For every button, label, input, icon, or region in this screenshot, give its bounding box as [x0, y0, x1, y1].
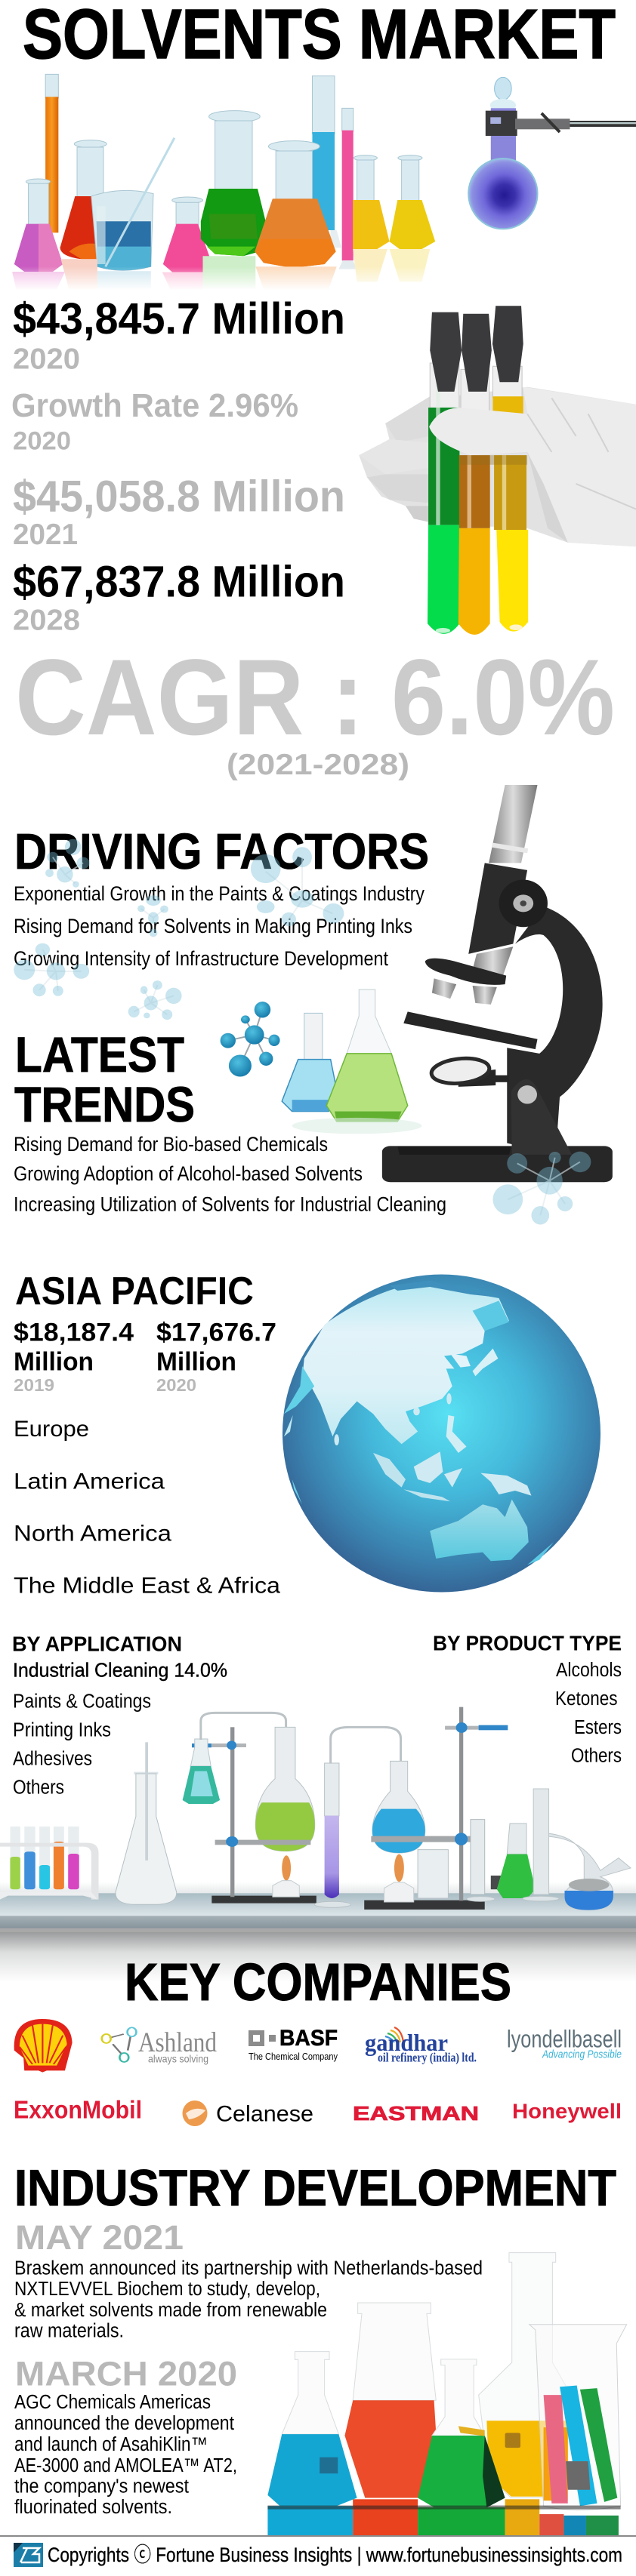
unit 2019: Million [14, 1348, 94, 1377]
logo: Honeywell: Honeywell [512, 2100, 622, 2123]
flask cyan [267, 2352, 357, 2506]
logo: ExxonMobil: ExxonMobil [14, 2096, 142, 2124]
purple test tube [314, 1763, 351, 1907]
region: Europe: Europe [14, 1417, 89, 1442]
growth year: 2020 [13, 427, 71, 456]
flask: green [201, 111, 267, 256]
region: Latin America: Latin America [14, 1470, 165, 1494]
trend 1: Rising Demand for Bio-based Chemicals [14, 1133, 328, 1156]
application: printing inks: Printing Inks [13, 1720, 111, 1741]
molecule top-centre [251, 847, 344, 926]
region: Middle East: The Middle East & Africa [14, 1574, 280, 1599]
flask: magenta [14, 179, 63, 272]
test tube yellow [492, 366, 528, 632]
round flask blue [372, 1761, 425, 1853]
conical flask clear [116, 1742, 177, 1904]
illustration: microscope with flasks [221, 785, 613, 1224]
logo: Eastman: EASTMAN [353, 2102, 479, 2125]
graduated cylinder [467, 1820, 495, 1901]
bench [0, 1882, 636, 1934]
logo: BASF [249, 2026, 338, 2062]
factor 2: Rising Demand for Solvents in Making Printing Inks [14, 915, 412, 937]
tall cylinder [523, 1789, 559, 1901]
note March 2020: AE-3000 and AMOLEA™ AT2, [14, 2455, 237, 2476]
factor 3: Growing Intensity of Infrastructure Development [14, 947, 389, 970]
value 2020: $43,845.7 Million [13, 294, 345, 343]
heading: ASIA PACIFIC [15, 1270, 254, 1313]
note March 2020: announced the development [14, 2413, 234, 2434]
heading: DRIVING FACTORS [14, 823, 429, 880]
year 2019: 2019 [14, 1375, 54, 1395]
molecule centre [128, 980, 182, 1020]
note March 2020: AGC Chemicals Americas [14, 2392, 211, 2413]
illustration: coloured glassware [267, 2253, 627, 2535]
trend 2: Growing Adoption of Alcohol-based Solvents [14, 1162, 363, 1185]
burner right [384, 1854, 414, 1902]
flask green right [491, 1824, 536, 1898]
small beaker [418, 1850, 448, 1898]
logo: gandhar [365, 2027, 477, 2065]
note May 2021 [14, 2257, 483, 2342]
connecting tube right [331, 1727, 401, 1764]
panel: driving factors [14, 823, 429, 970]
logo: Celanese [183, 2101, 313, 2127]
panel: latest trends [14, 1026, 446, 1215]
region: North America: North America [14, 1522, 171, 1547]
logo: BASF: BASF [279, 2026, 338, 2051]
rubber stoppers [430, 306, 523, 392]
panel: segments [12, 1632, 622, 1799]
logo: BASF: The Chemical Company [249, 2051, 338, 2062]
unit 2020: Million [156, 1348, 236, 1377]
molecule top-left [45, 839, 90, 888]
flask: orange [255, 141, 336, 268]
logo: gandhar: oil refinery (india) ltd. [378, 2051, 477, 2065]
growth rate: Growth Rate 2.96% [11, 387, 298, 424]
note March 2020: the company's newest [14, 2476, 189, 2497]
stand right [364, 1707, 508, 1910]
panel: industry development [14, 2159, 616, 2518]
year label: 2020 [13, 343, 80, 376]
stand left [192, 1727, 316, 1904]
by product type heading: BY PRODUCT TYPE [433, 1632, 622, 1655]
molecule: pale bottom-right [492, 1152, 591, 1224]
product: others: Others [571, 1746, 622, 1767]
application: industrial cleaning: Industrial Cleaning 14.0% [13, 1659, 227, 1682]
year 2021: 2021 [13, 519, 78, 551]
note May 2021: & market solvents made from renewable [14, 2300, 327, 2321]
flask: yellow right [390, 155, 435, 249]
flask green [418, 2359, 505, 2507]
product: alcohols: Alcohols [556, 1660, 622, 1681]
flask shadows [292, 1118, 421, 1134]
icon: Fortune Business Insights logo [14, 2543, 43, 2567]
beaker red [344, 2303, 440, 2498]
application: others: Others [13, 1777, 64, 1799]
value 2020: $17,676.7 [156, 1319, 276, 1347]
flask: green [326, 989, 408, 1122]
flask on clamp [468, 77, 636, 229]
logo: Ashland: always solving [148, 2053, 208, 2065]
panel: market figures [11, 294, 345, 637]
value 2019: $18,187.4 [14, 1319, 134, 1347]
by application heading: BY APPLICATION [12, 1633, 182, 1656]
logo: Shell [14, 2019, 73, 2073]
cylinder: blue [312, 76, 341, 248]
continents [284, 1281, 554, 1565]
panel: regional [14, 1270, 280, 1599]
year 2020: 2020 [156, 1375, 196, 1395]
application: adhesives: Adhesives [13, 1749, 92, 1770]
flask small teal [183, 1739, 220, 1804]
footer [0, 2535, 636, 2567]
note May 2021: Braskem announced its partnership with Netherlands-based [14, 2257, 483, 2279]
logo: gandhar: gandhar [365, 2029, 448, 2056]
retort [549, 1833, 631, 1910]
test tube rack [0, 1827, 98, 1900]
burette: orange [45, 74, 58, 232]
microscope [382, 785, 613, 1182]
round flask green [255, 1727, 315, 1851]
molecule left [14, 943, 89, 996]
logo: Ashland: Ashland [138, 2027, 217, 2058]
application: paints: Paints & Coatings [13, 1691, 151, 1713]
molecule mid [137, 895, 168, 937]
logo: Ashland [102, 2027, 217, 2065]
flask: blue [282, 1013, 338, 1111]
note March 2020: fluorinated solvents. [14, 2497, 172, 2518]
product: esters: Esters [574, 1717, 622, 1738]
note May 2021: NXTLEVVEL Biochem to study, develop, [14, 2279, 320, 2300]
heading line 2: TRENDS [14, 1076, 195, 1132]
flask: red [60, 140, 113, 259]
flask reflections [0, 249, 446, 291]
note March 2020 [14, 2392, 237, 2518]
tube: pink [338, 108, 357, 269]
burner left [273, 1855, 299, 1897]
clamp arm and knobs left [215, 1740, 310, 1847]
beaker: blue [91, 138, 174, 270]
beaker with tubes [529, 2325, 627, 2510]
illustration: laboratory bench [0, 1707, 636, 1934]
date May 2021: MAY 2021 [15, 2218, 184, 2257]
flask: yellow left [353, 155, 390, 249]
flask: pink [163, 197, 212, 272]
note May 2021: raw materials. [14, 2321, 124, 2342]
ocean sphere [282, 1274, 600, 1593]
value 2028: $67,837.8 Million [13, 557, 345, 607]
gloved thumb [429, 387, 636, 546]
product: ketones: Ketones [555, 1688, 618, 1710]
date March 2020: MARCH 2020 [15, 2355, 237, 2393]
connecting tube left [201, 1713, 286, 1740]
decorative molecules [14, 839, 344, 1020]
logo: LyondellBasell [507, 2026, 622, 2061]
illustration: gloved hand holding test tubes [359, 306, 636, 635]
panel: company logos [14, 2019, 622, 2127]
logo: Celanese: Celanese [216, 2102, 313, 2127]
year 2028: 2028 [13, 604, 80, 637]
glove [359, 387, 636, 546]
heading: key companies: KEY COMPANIES [125, 1953, 511, 2011]
note March 2020: and launch of AsahiKlin™ [14, 2434, 208, 2455]
test tube green [428, 363, 459, 634]
illustration: colourful flasks [0, 74, 636, 291]
globe [282, 1274, 600, 1593]
bench shadow [0, 1932, 636, 1982]
CAGR period: (2021-2028) [227, 749, 409, 781]
tall flask yellow [479, 2253, 568, 2498]
test tube orange [458, 369, 490, 635]
molecule: blue [221, 1002, 280, 1077]
table reflections [267, 2499, 621, 2535]
value 2021: $45,058.8 Million [13, 472, 345, 521]
factor 1: Exponential Growth in the Paints & Coatings Industry [14, 882, 425, 905]
heading line 1: LATEST [15, 1026, 184, 1082]
trend 3: Increasing Utilization of Solvents for Industrial Cleaning [14, 1193, 446, 1215]
